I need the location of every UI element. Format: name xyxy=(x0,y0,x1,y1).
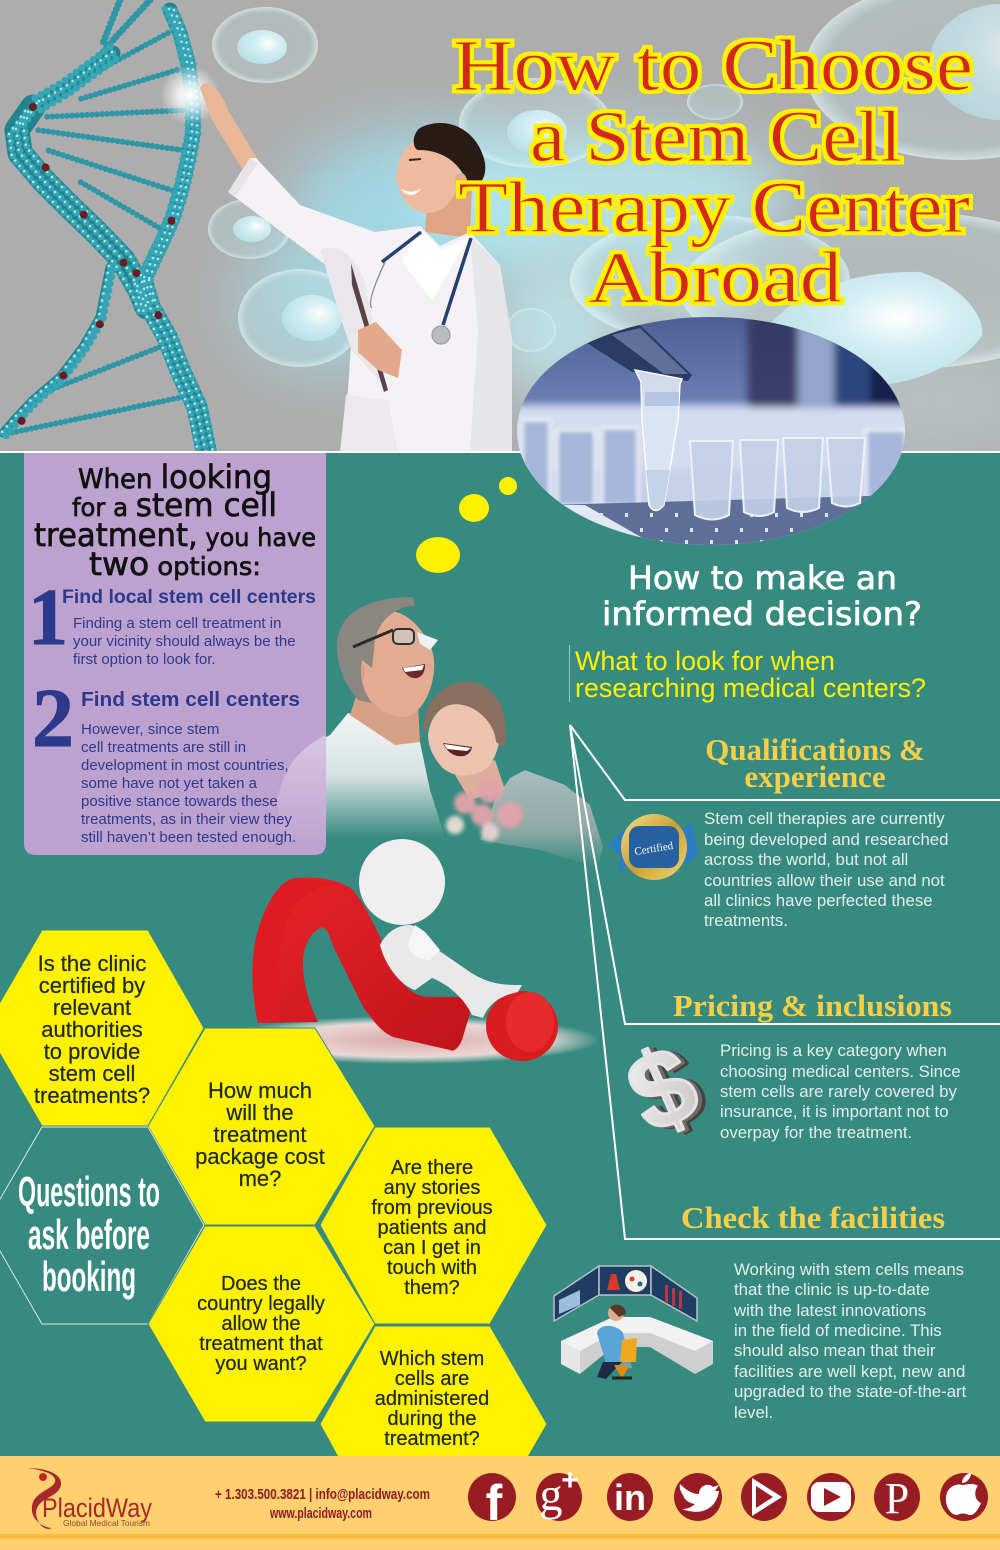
option 1: your vicinity should always be the xyxy=(73,633,296,650)
text: facilities are well kept, new and xyxy=(734,1362,965,1381)
red ball xyxy=(486,991,558,1061)
text: being developed and researched xyxy=(704,830,948,849)
man's head xyxy=(337,597,438,745)
hexagon: which stem cells: cells are xyxy=(395,1368,469,1390)
hexagon: clinic certified: to provide xyxy=(44,1039,140,1064)
heading: two options xyxy=(34,458,316,583)
text: with the latest innovations xyxy=(733,1301,926,1320)
title: a Stem Cell xyxy=(530,96,902,177)
header: microscope cell background xyxy=(0,0,1000,460)
hexagon: package cost: treatment xyxy=(214,1122,306,1147)
figure body xyxy=(380,925,522,1018)
blurred backdrop xyxy=(515,312,910,468)
icon: facebook: f xyxy=(486,1475,503,1531)
hexagon: questions to ask: booking xyxy=(42,1253,136,1300)
pipette xyxy=(587,323,692,381)
section: pricing and inclusions xyxy=(610,988,961,1157)
section heading: informed decision? xyxy=(602,595,922,633)
blurred test tube row xyxy=(522,420,906,506)
hexagon: legally allow: country legally xyxy=(197,1293,325,1315)
glow at fingertip xyxy=(160,65,220,125)
hexagon: clinic certified: Is the clinic xyxy=(38,951,146,976)
text: level. xyxy=(734,1403,773,1422)
hexagon: legally allow xyxy=(148,1226,375,1422)
icon: DNA double helix xyxy=(2,0,214,457)
hexagon: legally allow: treatment that xyxy=(199,1333,323,1355)
heading: two options: for a stem cell xyxy=(72,486,277,524)
text: insurance, it is important not to xyxy=(720,1102,949,1121)
pointer lines to sections xyxy=(570,725,1000,1239)
option 1: 1 xyxy=(28,574,68,662)
heading: experience xyxy=(744,759,886,794)
hexagon: package cost: How much xyxy=(208,1078,312,1103)
woman's head xyxy=(424,682,506,800)
icon: dollar sign: $ xyxy=(610,1021,714,1156)
heading: two options: When looking xyxy=(78,458,272,496)
text: stem cells are rarely covered by xyxy=(720,1082,957,1101)
single test tube xyxy=(635,370,682,510)
doctor hand on clipboard xyxy=(358,322,402,378)
text: Working with stem cells means xyxy=(734,1260,964,1279)
hexagon: clinic certified xyxy=(0,930,204,1126)
DNA rungs xyxy=(10,0,187,433)
text: treatments. xyxy=(704,911,788,930)
white divider xyxy=(0,451,1000,453)
option 1 xyxy=(28,574,316,668)
tray with pegs xyxy=(563,496,870,545)
section heading: How to make an xyxy=(628,559,897,597)
stethoscope xyxy=(371,232,471,344)
heading: Qualifications & xyxy=(705,732,925,767)
icon: google plus: + xyxy=(561,1464,579,1497)
hexagon: previous patients: them? xyxy=(404,1277,460,1299)
DNA strands: beads xyxy=(3,9,214,457)
front test tubes xyxy=(690,438,865,520)
text: countries allow their use and not xyxy=(704,871,945,890)
icon: linkedin xyxy=(607,1473,653,1521)
heading: two options: two options: xyxy=(89,545,261,583)
icon: google play xyxy=(741,1473,787,1521)
floor shadow xyxy=(220,1016,600,1064)
option 1: Finding a stem cell treatment in xyxy=(73,615,281,632)
icon: certified badge xyxy=(608,814,698,880)
subheading with rule: researching medical centers? xyxy=(575,673,926,703)
question hexagons xyxy=(0,930,547,1457)
DNA strands: solid core xyxy=(3,10,207,455)
text: upgraded to the state-of-the-art xyxy=(734,1382,967,1401)
contact details: www.placidway.com xyxy=(269,1505,372,1522)
hexagon: legally allow: allow the xyxy=(222,1313,300,1335)
icon: certified badge: Certified xyxy=(634,840,675,858)
hexagon: package cost: will the xyxy=(225,1100,294,1125)
contact details xyxy=(215,1486,430,1522)
hexagon: clinic certified: authorities xyxy=(41,1017,143,1042)
hexagon: questions to ask: ask before xyxy=(28,1211,150,1258)
subheading with rule xyxy=(569,645,926,703)
icon: pinterest xyxy=(874,1473,920,1523)
option 2: treatments, as in their view they xyxy=(81,811,292,828)
man's shoulder overlapping panel xyxy=(277,735,326,845)
doctor illustration xyxy=(200,84,512,452)
figure arm xyxy=(408,925,440,960)
hexagon: previous patients: Are there xyxy=(391,1157,473,1179)
illustration: figure reclining on red question mark xyxy=(220,839,600,1064)
hexagon: previous patients: patients and xyxy=(378,1217,486,1239)
option 2: cell treatments are still in xyxy=(81,739,246,756)
thought bubbles xyxy=(416,477,517,573)
contact details: + 1.303.500.3821 | info@placidway.com xyxy=(215,1486,430,1503)
heading: Check the facilities xyxy=(681,1200,945,1235)
title xyxy=(453,25,973,318)
flowers xyxy=(446,777,523,841)
option 2: However, since stem xyxy=(81,721,219,738)
hexagon: package cost: package cost xyxy=(195,1144,325,1169)
option 2: still haven’t been tested enough. xyxy=(81,829,296,846)
text: all clinics have perfected these xyxy=(704,891,933,910)
hexagon: clinic certified: treatments? xyxy=(34,1083,150,1108)
icon: google plus: g xyxy=(540,1469,562,1520)
hexagon: previous patients: any stories xyxy=(384,1177,480,1199)
option 2: 2 xyxy=(32,672,74,765)
woman's blouse xyxy=(480,770,603,868)
red question mark xyxy=(252,878,471,1051)
text: should also mean that their xyxy=(734,1341,936,1360)
hexagon: which stem cells xyxy=(320,1326,547,1457)
heading: two options: treatment, you have xyxy=(34,516,316,554)
option 2 xyxy=(32,672,300,846)
man's shirt xyxy=(277,713,445,838)
doctor arm xyxy=(200,84,258,172)
option 2: Find stem cell centers xyxy=(81,689,300,711)
text: in the field of medicine. This xyxy=(734,1321,942,1340)
text: choosing medical centers. Since xyxy=(720,1062,961,1081)
text: Pricing is a key category when xyxy=(720,1041,947,1060)
option 2: development in most countries, xyxy=(81,757,289,774)
option 2: some have not yet taken a xyxy=(81,775,258,792)
hexagon: package cost xyxy=(148,1028,375,1225)
section: check the facilities xyxy=(554,1200,967,1422)
hexagon: previous patients: can I get in xyxy=(383,1237,481,1259)
hexagon: previous patients: touch with xyxy=(387,1257,477,1279)
icon: twitter xyxy=(674,1473,722,1521)
photo: test tubes in oval xyxy=(515,312,910,548)
icon: facebook xyxy=(468,1473,516,1531)
text: overpay for the treatment. xyxy=(720,1123,912,1142)
panel: two options xyxy=(24,453,326,855)
title: Abroad xyxy=(588,237,842,318)
footer xyxy=(0,1456,1000,1550)
hexagon: questions to ask: Questions to xyxy=(18,1168,160,1215)
clipboard xyxy=(320,247,388,392)
option 1: Find local stem cell centers xyxy=(62,587,316,608)
hexagon: questions to ask xyxy=(0,1127,204,1324)
hexagon: legally allow: you want? xyxy=(215,1353,307,1375)
subheading with rule: What to look for when xyxy=(575,646,835,676)
section: qualifications and experience xyxy=(608,732,948,930)
icon: dollar sign: $ xyxy=(614,1022,718,1157)
hexagon: clinic certified: relevant xyxy=(53,995,131,1020)
hexagon: legally allow: Does the xyxy=(221,1273,301,1295)
hexagon: clinic certified: certified by xyxy=(39,973,145,998)
hexagon: which stem cells: administered xyxy=(375,1388,489,1410)
hexagon: previous patients: from previous xyxy=(371,1197,493,1219)
text: that the clinic is up-to-date xyxy=(734,1280,930,1299)
doctor white coat xyxy=(228,158,512,452)
icon: linkedin: in xyxy=(614,1477,646,1518)
icon: youtube xyxy=(807,1473,855,1521)
heading: Pricing & inclusions xyxy=(673,988,952,1023)
logo: PlacidWay: Global Medical Tourism xyxy=(63,1518,150,1528)
icon: google plus xyxy=(536,1464,582,1521)
photo: smiling couple xyxy=(277,597,603,868)
icon: lab workstation xyxy=(554,1266,713,1379)
option 2: positive stance towards these xyxy=(81,793,278,810)
icon: dollar sign: $ xyxy=(617,1022,721,1157)
icon: pinterest: P xyxy=(885,1474,909,1523)
hexagon: package cost: me? xyxy=(239,1166,281,1191)
title: Therapy Center xyxy=(458,167,970,248)
hexagon: which stem cells: Which stem xyxy=(380,1348,484,1370)
text: Stem cell therapies are currently xyxy=(704,809,945,828)
figure head xyxy=(359,839,445,925)
hexagon: which stem cells: during the xyxy=(388,1408,476,1430)
icon: apple xyxy=(940,1473,988,1521)
hexagon: previous patients xyxy=(320,1127,547,1324)
heading xyxy=(705,732,925,794)
text: across the world, but not all xyxy=(704,850,908,869)
section heading xyxy=(602,559,922,633)
title: How to Choose xyxy=(453,25,973,106)
hexagon: clinic certified: stem cell xyxy=(49,1061,135,1086)
logo: PlacidWay xyxy=(28,1468,152,1529)
doctor neck and head xyxy=(394,123,485,238)
option 1: first option to look for. xyxy=(73,651,216,668)
logo: PlacidWay: PlacidWay xyxy=(42,1493,152,1523)
hexagon: which stem cells: treatment? xyxy=(384,1428,480,1450)
